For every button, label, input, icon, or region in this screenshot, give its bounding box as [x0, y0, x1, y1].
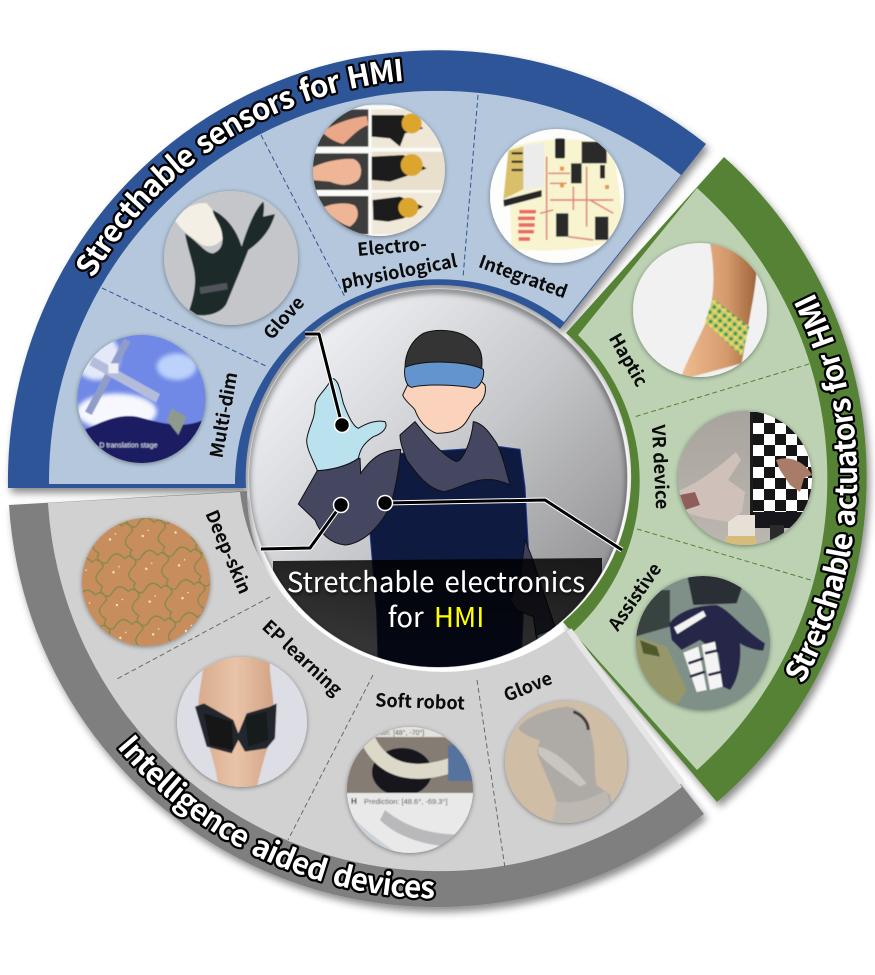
- label: VR device: VR device: [646, 423, 676, 510]
- photo: soft robot: ruth: [48°, -70°]: [377, 729, 424, 737]
- callout: glove line: [305, 334, 350, 432]
- panel: intelligence aided devices: [9, 491, 704, 907]
- photo: deep-skin tattoo: [80, 515, 215, 650]
- photo: multi-dim sensor: [70, 330, 213, 467]
- label: deep-skin: Deep-skin: [200, 506, 258, 598]
- panel: stretchable sensors: [8, 50, 706, 488]
- photo: EP learning armband: [172, 657, 313, 788]
- label: electro-physiological: physiological: [338, 247, 459, 295]
- heading: intelligence aided devices: Intelligence aided devices: [116, 732, 436, 901]
- label: haptic: Haptic: [603, 328, 655, 391]
- title: [287, 560, 585, 635]
- callout: sleeve line: [261, 498, 348, 549]
- label: soft robot: Soft robot: [375, 686, 466, 716]
- title: for HMI: [388, 595, 484, 635]
- photo: glove sensing: [503, 697, 630, 828]
- heading: stretchable actuators: Stretchable actuators for HMI: [784, 292, 860, 684]
- photo: soft robot: H: [351, 797, 357, 806]
- label: EP learning: EP learning: [257, 613, 349, 701]
- photo: assistive glove: [635, 573, 772, 712]
- label: integrated: Integrated: [475, 248, 571, 304]
- panel: stretchable actuators: [563, 157, 867, 802]
- photo: integrated circuit: [487, 128, 628, 263]
- photo: soft robot: Prediction: [48.6°, -69.3°]: [364, 797, 448, 806]
- heading: stretchable sensors: Strecthable sensors for HMI: [74, 56, 404, 279]
- photo: haptic arm band: [630, 240, 770, 380]
- label: electro-physiological: Electro-: [356, 230, 428, 262]
- label: assistive: Assistive: [601, 557, 667, 636]
- figure: person with HMI devices: [298, 330, 555, 670]
- photo: soft robot: [345, 725, 475, 858]
- photo: electrophysiological: [308, 105, 448, 238]
- label: glove intelligence: Glove: [499, 665, 556, 708]
- title: Stretchable electronics: [287, 560, 585, 600]
- label: multi-dim: Multi-dim: [203, 370, 243, 460]
- label: glove sensors: Glove: [257, 290, 310, 345]
- caption band: [273, 558, 602, 667]
- photo: multi-dim sensor: D translation stage: [99, 442, 158, 449]
- photo: glove sensor: [160, 190, 303, 327]
- callout: actuator line: [378, 496, 622, 550]
- central disk: [247, 288, 629, 680]
- photo: VR device: [675, 410, 815, 550]
